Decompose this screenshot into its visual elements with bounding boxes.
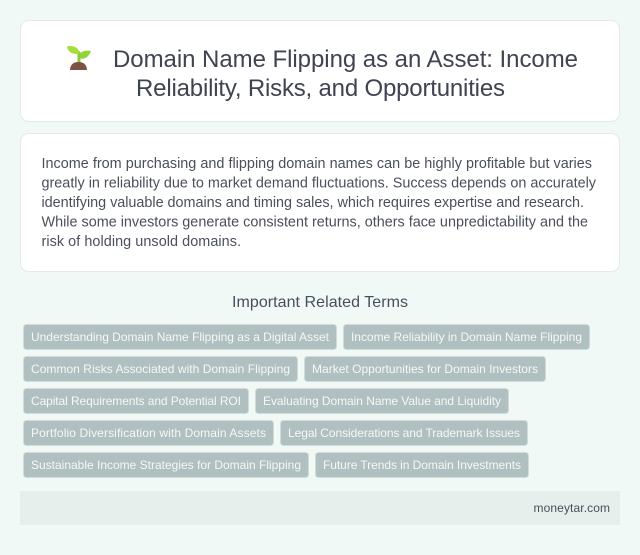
- intro paragraph: While some investors generate consistent returns, others face unpredictability and the: [42, 215, 588, 231]
- tag: [24, 356, 298, 382]
- intro paragraph: Income from purchasing and flipping domain names can be highly profitable but varies: [42, 156, 592, 172]
- footer bar: [20, 491, 620, 525]
- tag: [24, 388, 248, 414]
- tag: Portfolio Diversification with Domain Assets: [31, 426, 266, 440]
- panel: header card: [20, 20, 620, 122]
- tag: [344, 324, 590, 350]
- tag: Legal Considerations and Trademark Issues: [288, 426, 520, 440]
- heading: important related terms: Important Related Terms: [232, 294, 408, 311]
- tag: Income Reliability in Domain Name Flipping: [351, 330, 582, 344]
- intro paragraph: [42, 156, 597, 250]
- tag: [24, 420, 274, 446]
- tag: Understanding Domain Name Flipping as a Digital Asset: [31, 330, 330, 344]
- intro paragraph: greatly in reliability due to market demand fluctuations. Success depends on accurately: [42, 176, 597, 192]
- panel: intro text card: [20, 134, 620, 272]
- icon: sprout: [67, 46, 91, 70]
- tag: [316, 452, 528, 478]
- tag: Evaluating Domain Name Value and Liquidity: [263, 394, 501, 408]
- title: Domain Name Flipping as an Asset: Income: [113, 46, 578, 73]
- intro paragraph: identifying valuable domains and timing sales, which requires expertise and research.: [42, 195, 584, 211]
- tag: Capital Requirements and Potential ROI: [31, 394, 241, 408]
- tag: Future Trends in Domain Investments: [323, 458, 521, 472]
- tag: [24, 324, 336, 350]
- tag: [24, 452, 308, 478]
- title: [113, 46, 578, 102]
- tag: [256, 388, 508, 414]
- tag: [304, 356, 546, 382]
- tag: Common Risks Associated with Domain Flipping: [31, 362, 290, 376]
- intro paragraph: risk of holding unsold domains.: [42, 234, 241, 250]
- footer source: moneytar.com: [534, 501, 610, 515]
- tag: Market Opportunities for Domain Investors: [312, 362, 538, 376]
- title: Reliability, Risks, and Opportunities: [136, 75, 505, 102]
- tag list: [24, 324, 590, 478]
- tag: Sustainable Income Strategies for Domain Flipping: [31, 458, 301, 472]
- tag: [280, 420, 528, 446]
